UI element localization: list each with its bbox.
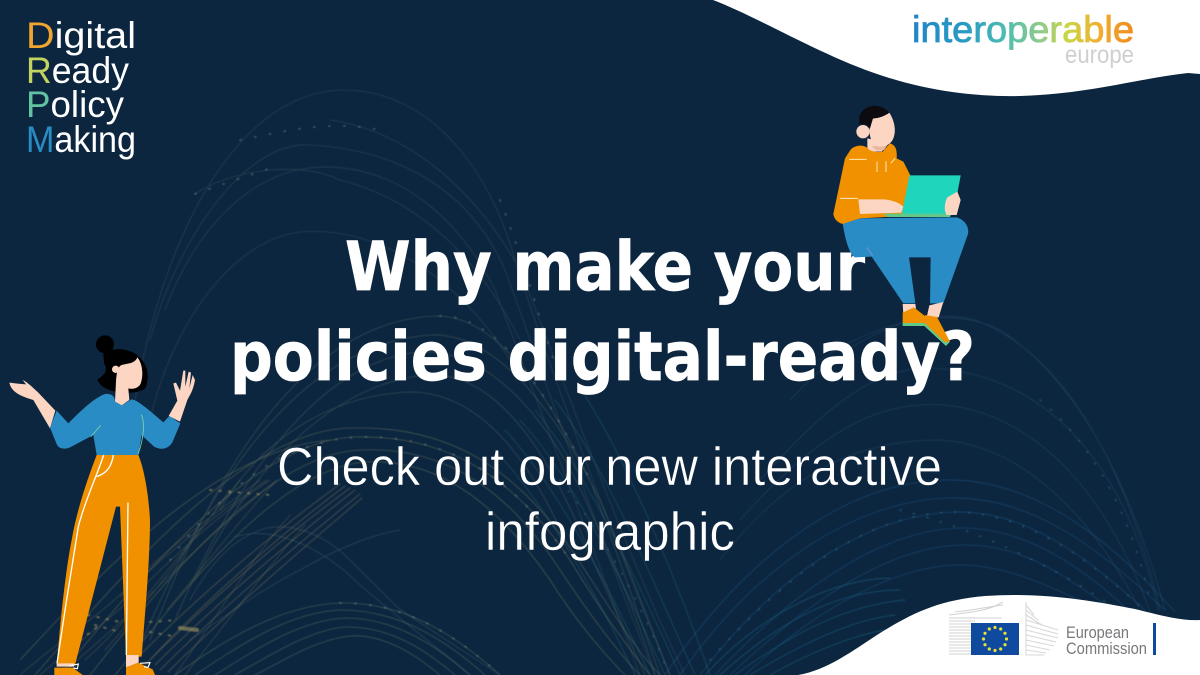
man hand [945, 192, 961, 215]
heading line 2: policies digital-ready? [230, 318, 975, 397]
wave: top right white [713, 0, 1200, 96]
man blue trousers [843, 217, 968, 303]
man shoes [903, 307, 950, 346]
logo: European Commission [949, 602, 1156, 658]
logo line: Making: Making [26, 119, 136, 160]
man forearm [858, 199, 903, 214]
illustration: woman with raised hands [9, 335, 195, 675]
subheading [277, 437, 942, 562]
woman ankles and shoes [54, 655, 155, 675]
heading [230, 228, 975, 397]
EC wordmark line 2: Commission [1066, 640, 1147, 658]
woman blue top [50, 394, 180, 455]
EC stars [982, 626, 1008, 652]
woman skin [9, 357, 195, 428]
logo: interoperable europe [912, 9, 1134, 69]
man laptop [884, 175, 961, 217]
illustration: man sitting with laptop [833, 106, 968, 346]
woman trouser lines [57, 455, 128, 663]
man hoodie seams [840, 158, 895, 198]
wave: bottom right white [798, 595, 1200, 675]
man orange hoodie [833, 143, 911, 224]
heading line 1: Why make your [345, 228, 865, 307]
logo line: Policy: Policy [26, 84, 124, 125]
EC blue bar [1153, 623, 1156, 655]
man hair [859, 106, 889, 128]
man face [870, 113, 895, 147]
man ankles [903, 302, 943, 317]
EC wordmark line 1: European [1066, 624, 1129, 642]
woman orange trousers [57, 455, 150, 665]
logo line: Ready: Ready [26, 50, 129, 91]
subheading line 1: Check out our new interactive [277, 437, 942, 497]
logo line: Digital: Digital [26, 15, 136, 56]
EC wordmark [1066, 624, 1147, 658]
logo: Digital Ready Policy Making [26, 15, 136, 160]
man trouser seam [867, 247, 873, 256]
woman blouse seams [91, 415, 143, 454]
subheading line 2: infographic [485, 502, 735, 562]
logo wordmark: europe: europe [1065, 41, 1134, 69]
EC building left [949, 602, 1003, 654]
EC building right [1026, 602, 1058, 655]
EC flag [971, 623, 1019, 655]
woman hair [96, 335, 148, 393]
man neck and ear [856, 125, 889, 152]
logo wordmark: interoperable: interoperable [912, 9, 1134, 50]
